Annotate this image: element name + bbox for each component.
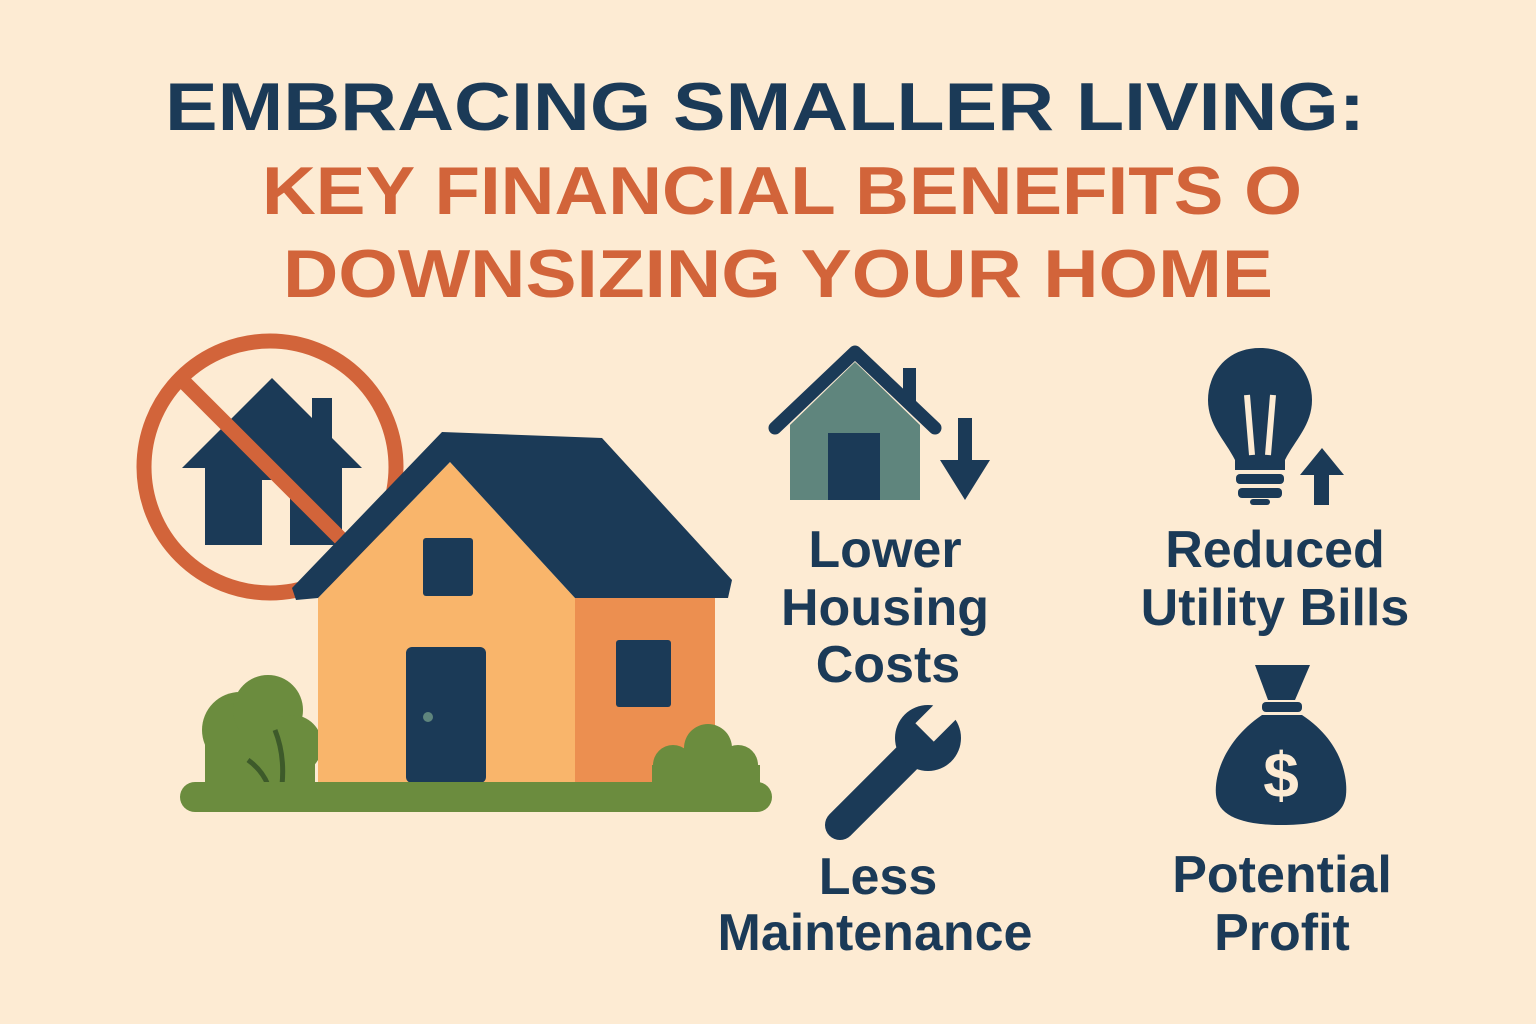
text: less maintenance — [718, 848, 1032, 962]
text: reduced utility bills: Utility Bills — [1141, 579, 1409, 637]
illustration: main house — [180, 432, 772, 812]
icon: small house with down arrow — [775, 352, 990, 500]
text: potential profit — [1172, 846, 1392, 962]
icon: no big house sign — [144, 341, 396, 593]
icon: wrench — [840, 696, 961, 825]
icon: money bag — [1216, 665, 1346, 825]
title line 1: EMBRACING SMALLER LIVING: — [165, 69, 1365, 145]
text: lower housing costs: Housing — [781, 579, 989, 637]
text: lower housing costs: Lower — [808, 521, 962, 579]
icon: light bulb with up arrow — [1208, 348, 1344, 505]
title line 2: KEY FINANCIAL BENEFITS O — [262, 153, 1302, 229]
text: less maintenance: Less — [819, 848, 937, 906]
text: reduced utility bills: Reduced — [1165, 521, 1385, 579]
icon: money bag: $ — [1263, 739, 1299, 811]
text: potential profit: Potential — [1172, 846, 1392, 904]
text: lower housing costs — [781, 521, 989, 694]
text: lower housing costs: Costs — [816, 636, 960, 694]
bush right — [652, 724, 760, 785]
title — [165, 69, 1365, 312]
title line 3: DOWNSIZING YOUR HOME — [283, 236, 1273, 312]
bush left — [202, 675, 322, 785]
text: potential profit: Profit — [1214, 904, 1350, 962]
text: less maintenance: Maintenance — [718, 904, 1032, 962]
text: reduced utility bills — [1141, 521, 1409, 637]
